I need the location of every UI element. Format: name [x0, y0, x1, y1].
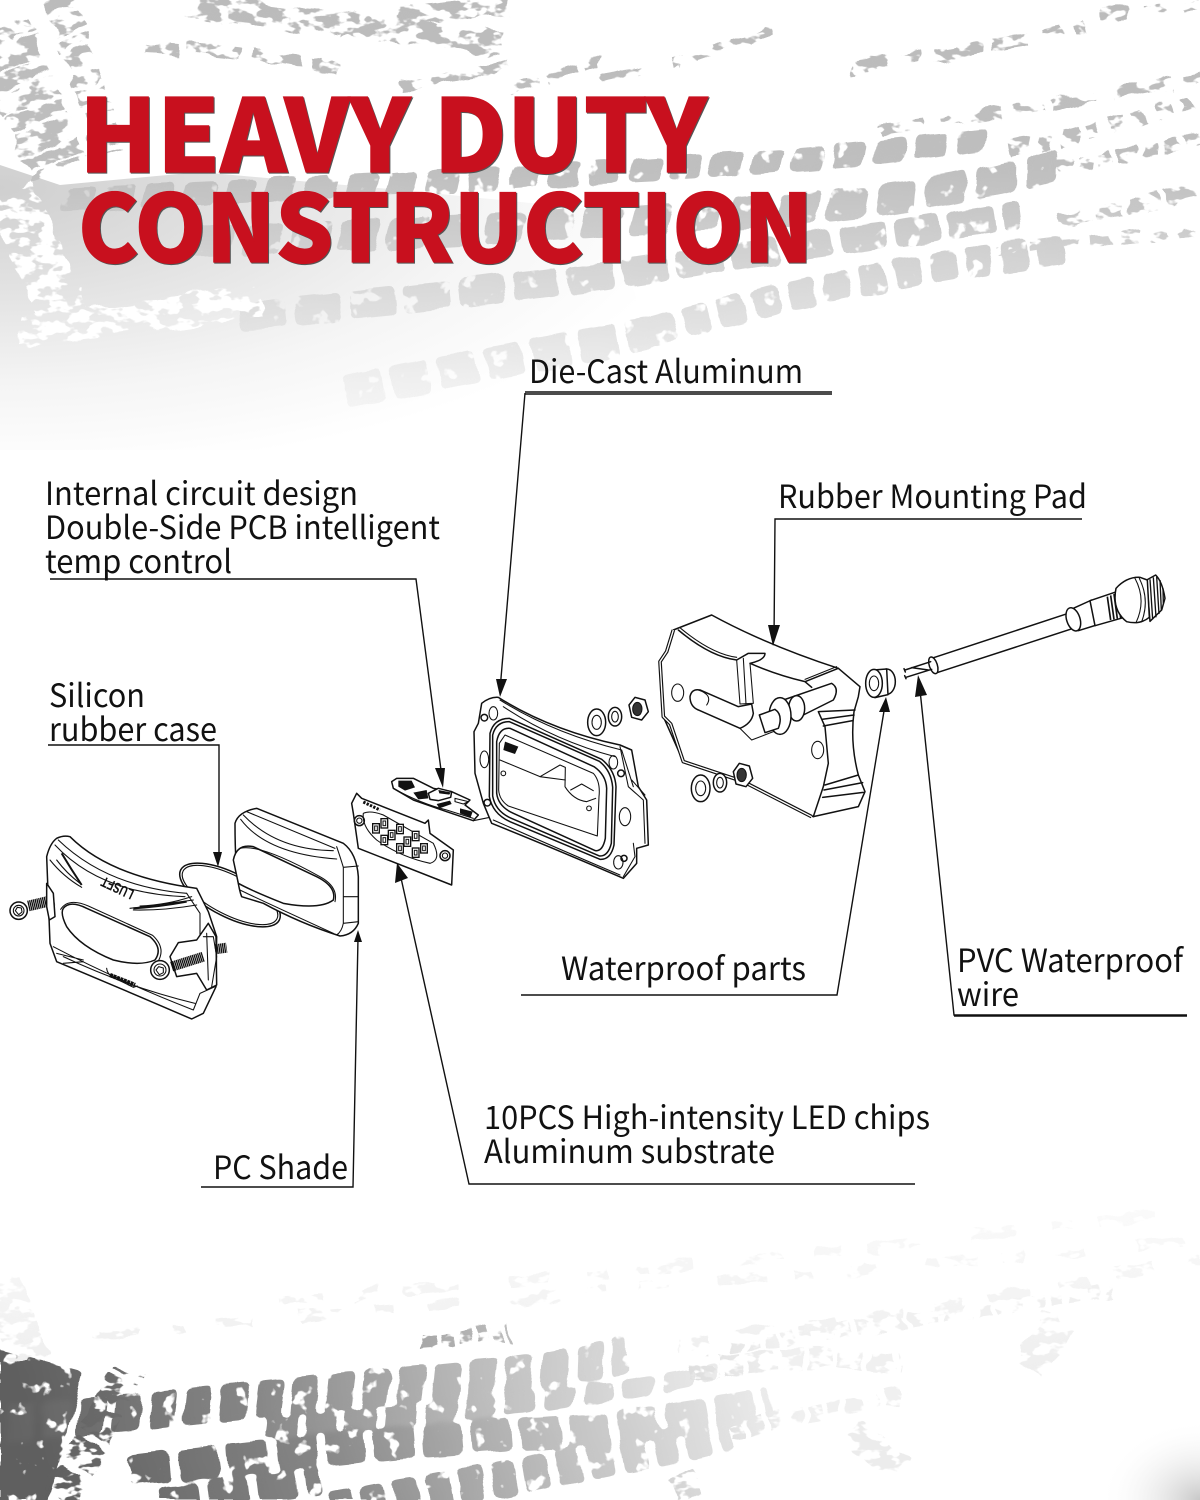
label: Internal circuit design: temp control [45, 537, 232, 583]
label: Silicon rubber case [48, 671, 222, 867]
exploded diagram: front case, seal, shade, LED plate [10, 793, 453, 1019]
front case [10, 836, 227, 1019]
waterproof grommet [866, 669, 895, 698]
exploded diagram: die-cast housing and rear pad [474, 615, 895, 878]
label: Die-Cast Aluminum [496, 347, 832, 697]
label: 10PCS LED chips [395, 863, 930, 1184]
label: 10PCS LED chips: 10PCS High-intensity LED chips [484, 1093, 930, 1139]
label: 10PCS LED chips: Aluminum substrate [484, 1127, 775, 1173]
label: Waterproof parts: Waterproof parts [561, 944, 806, 990]
rubber mounting pad [660, 615, 865, 817]
label: PVC Waterproof wire: PVC Waterproof [957, 936, 1185, 982]
background: upper tyre tracks [0, 0, 1200, 450]
label: Waterproof parts [521, 697, 890, 995]
label: Internal circuit design: Double-Side PCB intelligent [45, 503, 440, 549]
exploded diagram: PVC wire [904, 575, 1165, 679]
arrow: Internal circuit [435, 768, 445, 788]
title: HEAVY DUTY [79, 56, 709, 202]
circuit board [392, 778, 495, 821]
arrow: Die-Cast Aluminum [496, 679, 507, 697]
label: PC Shade: PC Shade [213, 1143, 348, 1189]
title [78, 56, 813, 289]
left screw [28, 900, 54, 906]
label: Silicon rubber case: Silicon [49, 671, 145, 717]
seal ring [171, 850, 289, 940]
label: Rubber Mounting Pad [768, 472, 1087, 646]
label: Internal circuit design [45, 469, 445, 788]
arrow: PC Shade [354, 930, 362, 942]
logo: LUSFT [99, 873, 137, 902]
die-cast housing [474, 697, 648, 878]
arrow: Waterproof parts [879, 697, 890, 712]
title: CONSTRUCTION [78, 154, 813, 289]
washers and nut, lower [691, 763, 753, 802]
rear shade [233, 808, 358, 936]
label: Internal circuit design: Internal circuit design [45, 469, 358, 515]
LED plate [352, 793, 453, 885]
label: Silicon rubber case: rubber case [49, 705, 217, 751]
background: lower tyre tracks [0, 1210, 1200, 1500]
label: Die-Cast Aluminum: Die-Cast Aluminum [529, 347, 803, 393]
arrow: Rubber Mounting Pad [768, 625, 780, 646]
arrow: Silicon rubber case [213, 852, 222, 867]
arrow: LED chips [395, 863, 408, 883]
label: Rubber Mounting Pad: Rubber Mounting Pad [778, 472, 1087, 518]
arrow: PVC wire [915, 675, 927, 697]
washers and nut, upper [588, 697, 648, 736]
right screw [170, 923, 217, 990]
label: PC Shade [201, 930, 362, 1189]
label: PVC Waterproof wire [915, 675, 1187, 1016]
label: PVC Waterproof wire: wire [957, 970, 1019, 1016]
